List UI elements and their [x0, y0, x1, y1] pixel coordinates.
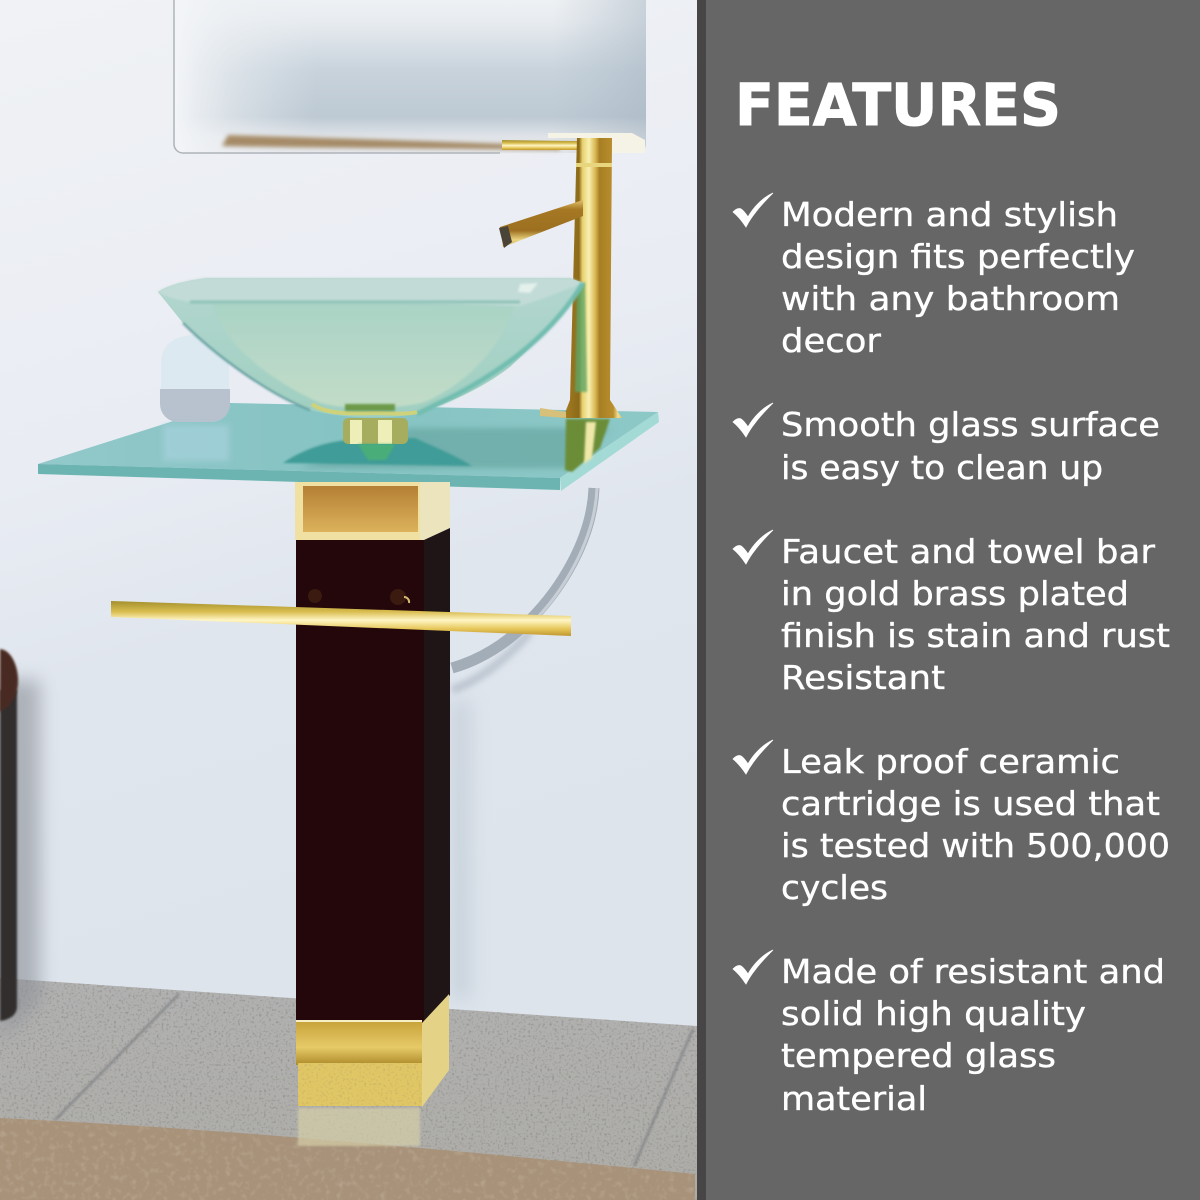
drain pipe [452, 488, 597, 690]
feature 5 [733, 950, 1165, 1118]
icon: check mark [733, 740, 773, 774]
rug texture [0, 1118, 697, 1200]
features panel [706, 0, 1200, 1200]
feature 3 text: Resistant [781, 659, 945, 697]
panel edge strip [697, 0, 706, 1200]
feature 4 text: Leak proof ceramic [781, 743, 1120, 781]
feature 5 text: tempered glass [781, 1037, 1056, 1075]
feature 1 text: Modern and stylish [781, 196, 1118, 234]
feature 4 text: cycles [781, 869, 888, 907]
feature 3 text [781, 533, 1170, 697]
icon: check mark [733, 193, 773, 227]
dark object at left edge [0, 649, 40, 1040]
feature 4 text [781, 743, 1170, 907]
feature 1 text: with any bathroom [781, 280, 1120, 318]
feature 2 text: is easy to clean up [781, 449, 1103, 487]
glass shelf [38, 403, 659, 491]
feature 1 text [781, 196, 1135, 360]
faucet [499, 133, 645, 418]
feature 1 text: design fits perfectly [781, 238, 1135, 276]
feature 3 text: Faucet and towel bar [781, 533, 1156, 571]
floor speckle [0, 978, 697, 1200]
floor tile lines [55, 994, 693, 1166]
gold collar under shelf [295, 482, 450, 540]
shelf shadow of sink [283, 438, 472, 466]
feature 5 text: material [781, 1080, 927, 1118]
soap dispenser [160, 335, 230, 461]
product photo: glass vessel sink on pedestal [0, 0, 697, 1200]
floor [0, 978, 697, 1200]
feature 4 text: cartridge is used that [781, 785, 1160, 823]
pedestal shadow [450, 700, 472, 1000]
feature 2 text: Smooth glass surface [781, 406, 1160, 444]
feature 5 text: Made of resistant and [781, 953, 1165, 991]
feature 3 text: finish is stain and rust [781, 617, 1170, 655]
towel bar [111, 601, 571, 636]
feature 5 text [781, 953, 1165, 1118]
feature 4 [733, 740, 1170, 907]
icon: check mark [733, 950, 773, 984]
feature 1 [733, 193, 1135, 360]
feature 3 [733, 530, 1170, 697]
feature 2 text [781, 406, 1160, 487]
sink interior [212, 303, 516, 408]
glass vessel sink [158, 278, 583, 417]
feature 3 text: in gold brass plated [781, 575, 1129, 613]
feature 2 [733, 403, 1160, 487]
sink rim [158, 278, 583, 306]
icon: check mark [733, 403, 773, 437]
heading: FEATURES [735, 71, 1061, 139]
wooden pedestal [296, 528, 450, 1023]
mirror [174, 0, 646, 153]
sink drain [343, 418, 408, 460]
rug [0, 1118, 695, 1200]
wall [0, 0, 697, 1040]
feature 4 text: is tested with 500,000 [781, 827, 1170, 865]
faucet reflection [565, 419, 610, 472]
shelf darker reflection [300, 428, 610, 468]
icon: check mark [733, 530, 773, 564]
feature 1 text: decor [781, 322, 882, 360]
feature 5 text: solid high quality [781, 995, 1086, 1033]
gold pedestal foot [296, 994, 449, 1146]
